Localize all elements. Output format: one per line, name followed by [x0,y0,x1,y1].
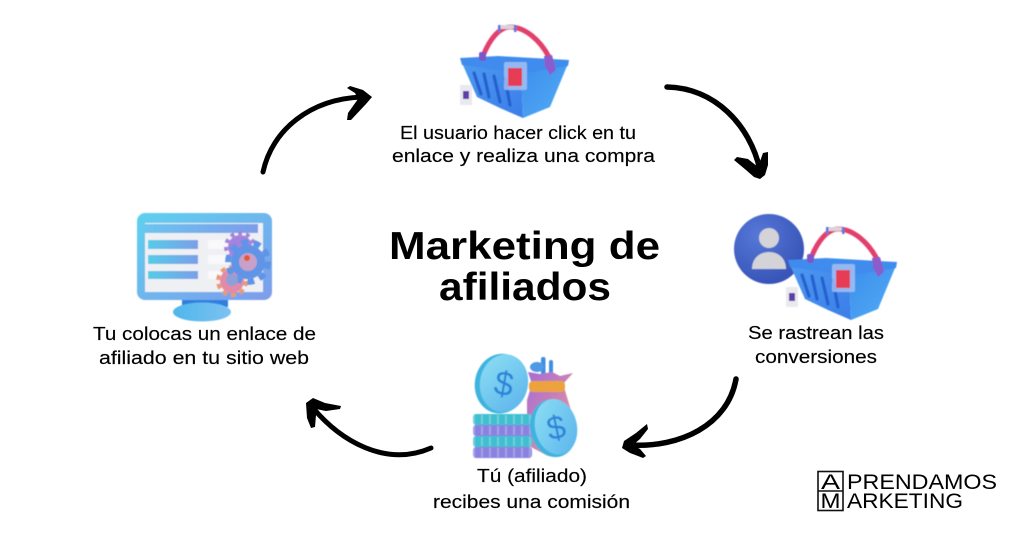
text: step place link: afiliado en tu sitio web [99,347,309,368]
icon: user and basket (right) [734,214,897,320]
arrow: user to coins [622,379,736,458]
logo: Aprendamos Marketing: M [820,490,840,513]
text: step user click [392,122,656,166]
text: step place link [93,323,316,368]
icon: shopping basket (top) [460,25,569,118]
title: afiliados [439,266,611,309]
logo: Aprendamos Marketing [818,471,997,513]
logo: Aprendamos Marketing: ARKETING [847,490,963,513]
text: step user click: El usuario hacer click en tu [400,122,636,143]
text: step commission [433,465,630,512]
text: step commission: recibes una comisión [433,491,630,512]
logo: Aprendamos Marketing: A [821,471,840,494]
icon: monitor with gears (left) [137,213,272,322]
title: Marketing de [389,225,660,268]
icon: coins and money bag (bottom): $ [543,407,569,447]
title [389,225,660,309]
icon: coins and money bag (bottom) [470,350,583,462]
text: step user click: enlace y realiza una compra [392,145,656,166]
icon: coins and money bag (bottom): $ [491,364,517,405]
text: step tracking [748,322,884,367]
text: step tracking: Se rastrean las [748,322,884,343]
arrow: monitor to basket [263,86,372,172]
arrow: coins to monitor [306,398,431,455]
arrow: basket to user [667,87,768,179]
text: step commission: Tú (afiliado) [477,465,587,486]
text: step place link: Tu colocas un enlace de [93,323,316,344]
text: step tracking: conversiones [755,346,877,367]
logo: Aprendamos Marketing: PRENDAMOS [847,471,997,494]
